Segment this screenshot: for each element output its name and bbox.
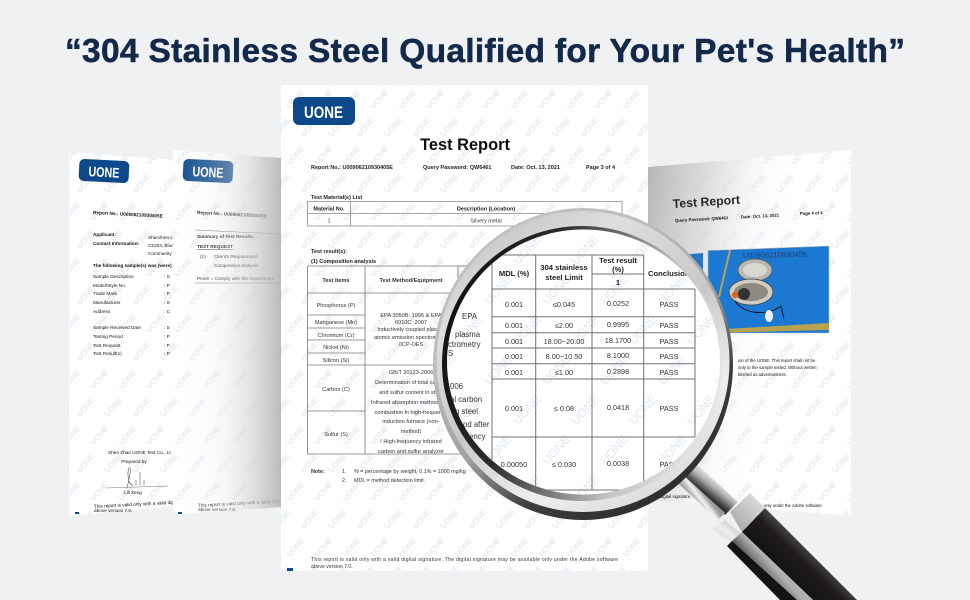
table values: ≤1.00: [555, 368, 573, 377]
title: “304 Stainless Steel Qualified for Your Pet's Health”: [65, 33, 905, 70]
logo: UONE page 2: [182, 159, 234, 183]
table values: ≤0.045: [553, 300, 575, 309]
table header: MDL (%): [499, 269, 530, 278]
table: composition analysis: combustion in high-frequency: [374, 410, 448, 416]
table: composition analysis: atomic emission spectrometry: [374, 335, 448, 341]
table values: 0.001: [505, 404, 523, 413]
text block: applicant details: Prepared by: [121, 459, 147, 464]
table: composition analysis: / High-frequency infrared: [380, 439, 442, 445]
text block: applicant details: Manufacturer: [93, 300, 121, 305]
text block: applicant details: Community: [148, 251, 172, 256]
text block: summary of results: above version 7.0.: [198, 507, 236, 512]
text block: applicant details: : P: [164, 343, 170, 348]
table header: [499, 258, 686, 285]
text block: applicant details: Shen Zhan UONE Test Co., Lt: [108, 450, 171, 455]
text block: summary of results: Client's Requirement: [214, 254, 258, 259]
text block: applicant details: Model/Style No.: [93, 283, 126, 288]
table values: 0.001: [505, 352, 523, 361]
text block: summary of results: PASS = Comply with the requirement: [197, 276, 275, 281]
photo: tested sample: U00906210930405: [743, 250, 807, 260]
table values: [501, 299, 679, 469]
table values: 0.9995: [607, 320, 629, 329]
text block: applicant details: Testing Period: [93, 334, 123, 339]
text block: applicant details: : P: [164, 351, 170, 356]
table: test materials: Description (Location): [457, 206, 515, 212]
text block: applicant details: The following sample(s) was (were): [93, 263, 172, 268]
logo: UONE page 2: UONE: [192, 163, 224, 181]
table: test materials: [308, 202, 622, 226]
text block: applicant details: : P: [164, 283, 170, 288]
logo: UONE page 1: UONE: [88, 163, 120, 181]
heading: test report page 4: Test Report: [672, 193, 740, 211]
table header: steel Limit: [545, 273, 583, 282]
table: composition analysis: EPA 3050B: 1996 & EPA: [380, 313, 442, 319]
magnified method text: od after: [463, 420, 490, 429]
table: composition analysis: method): [401, 429, 421, 435]
text block: applicant details: : S: [164, 325, 170, 330]
text block: notes: % = percentage by weight, 0.1% = 1000 mg/kg: [354, 469, 466, 475]
text block: report meta: Query Password: QW6461: [423, 165, 491, 171]
table values: 0.001: [505, 368, 523, 377]
text block: applicant details: above version 7.0.: [94, 508, 132, 513]
heading: test report: Test Report: [420, 136, 510, 154]
text block: page 4 notes: ion of the UONE. This report shall not be: [738, 358, 816, 363]
text block: report meta: Page 3 of 4: [586, 165, 616, 171]
text block: summary of results: This report is valid only with a valid digit: [198, 499, 281, 508]
table values: 18.1700: [605, 336, 631, 345]
magnified method text: [448, 312, 490, 441]
table header: 304 stainless: [540, 263, 588, 272]
table values: PASS: [660, 404, 679, 413]
text block: applicant details: : S: [164, 300, 170, 305]
text block: applicant details: Sample Received Date: [93, 325, 141, 330]
text block: applicant details: Sample Description: [93, 274, 134, 279]
table: composition analysis: Infrared absorption method after: [371, 400, 451, 406]
table: composition analysis: Test Method/Equipment: [380, 278, 443, 284]
panel: main test report page: [281, 85, 648, 571]
table: composition analysis: Phosphorus (P): [317, 303, 356, 309]
magnified method text: EPA: [462, 312, 478, 321]
panel: magnified lens table: [445, 228, 722, 496]
text block: applicant details: Test Result(s): [93, 351, 122, 356]
table: composition analysis: Determination of total carbon: [375, 380, 447, 386]
text block: summary of results: TEST REQUEST: [197, 244, 233, 249]
table: composition analysis: Sulfur (S): [324, 432, 348, 438]
table values: ≤2.00: [555, 321, 573, 330]
table: test materials: 1: [327, 218, 331, 224]
table: test materials: Material No.: [313, 206, 345, 212]
logo: UONE page 1: [78, 159, 130, 183]
text block: material heading: Test Material(s) List: [311, 195, 362, 201]
text block: report line: [675, 210, 823, 223]
table values: 0.2898: [607, 367, 629, 376]
table: composition analysis: and sulfur content in steel: [379, 390, 443, 396]
text block: footer: [311, 557, 618, 570]
text block: summary of results: (1): [200, 254, 206, 259]
text block: report line: Date: Oct. 13, 2021: [741, 212, 780, 219]
text block: notes: Note:: [311, 469, 325, 475]
text block: report line: Page 4 of 4: [800, 210, 823, 216]
table values: 0.001: [505, 300, 523, 309]
text block: applicant details: [93, 210, 177, 513]
text block: applicant details: Contact Information:: [93, 241, 140, 246]
table values: 0.0038: [607, 459, 629, 468]
panel: right report page: [640, 150, 851, 516]
table values: 8.1000: [607, 351, 629, 360]
text block: page 4 notes: only to the sample tested. Without written: [738, 365, 817, 370]
text block: applicant details: : P: [164, 291, 170, 296]
table values: ≤ 0.030: [552, 460, 576, 469]
text block: page 4 notes: digital signature.: [660, 494, 691, 499]
magnified method text: ency: [469, 432, 486, 441]
text block: applicant details: : C: [164, 309, 171, 314]
text block: report meta: [311, 165, 616, 171]
table: composition analysis: [308, 266, 500, 455]
table: composition analysis: /ICP-OES: [399, 342, 424, 348]
logo: UONE main: UONE: [304, 103, 343, 122]
table values: 0.001: [505, 337, 523, 346]
text block: applicant details: Applicant:: [93, 232, 116, 237]
table values: PASS: [660, 352, 679, 361]
table values: 0.001: [505, 321, 523, 330]
text block: applicant details: : P: [164, 334, 170, 339]
table values: PASS: [660, 321, 679, 330]
table header: Test result: [599, 256, 637, 265]
text block: notes: 1.: [342, 469, 346, 475]
text block: applicant details: This report is valid only with a valid digit: [94, 500, 177, 509]
page shadow: [173, 150, 281, 515]
table: composition analysis: Test Items: [322, 278, 350, 284]
table: composition analysis: Inductively coupled plasma: [377, 327, 445, 333]
table: composition analysis: Carbon (C): [322, 387, 350, 393]
text block: page 4 notes: blished as advertisement.: [738, 372, 787, 377]
text block: footer: above version 7.0.: [311, 564, 353, 570]
table: composition analysis: induction furnace (non-: [382, 419, 440, 425]
magnified method text: plasma: [455, 330, 481, 339]
text block: report line: Query Password: QW6461: [675, 215, 729, 223]
panel: left report page 2: [173, 150, 281, 515]
panel: left report page 1: [69, 152, 177, 516]
table values: PASS: [660, 460, 679, 469]
table header: (%): [612, 265, 624, 274]
table values: 8.00~10.50: [546, 352, 582, 361]
text block: notes: MDL = method detection limit.: [354, 478, 425, 484]
table values: PASS: [660, 337, 679, 346]
text block: footer: This report is valid only with a valid digital signature. The digital signature may be available only under the Adobe software: [311, 557, 618, 563]
text block: applicant details: Shenzhen L: [148, 235, 173, 240]
text block: applicant details: : S: [164, 274, 170, 279]
table: composition analysis: Chromium (Cr): [318, 333, 355, 339]
table: composition analysis: GB/T 20123-2006: [389, 370, 433, 376]
icon: signature: [127, 468, 144, 488]
magnified method text: 006: [450, 382, 463, 391]
magnified method text: al carbon: [450, 395, 482, 404]
icon: magnifier ring: [433, 208, 733, 520]
table header: Conclusion: [648, 269, 690, 278]
text block: summary of results: Report No.: U00906210930405E: [197, 210, 267, 219]
table values: 0.0252: [607, 299, 629, 308]
text block: results heading: Test result(s):: [311, 249, 347, 255]
table: composition analysis: Nickel (Ni): [323, 345, 349, 351]
table: composition analysis: carbon and sulfur analyzer: [378, 449, 444, 455]
text block: summary of results: Composition analysis: [214, 263, 259, 268]
text block: applicant details: Report No.: U00906210930405E: [93, 210, 163, 219]
magnified method text: g steel: [455, 407, 478, 416]
table: composition analysis: 6010C: 2007: [395, 320, 427, 326]
table: composition analysis: Silicon (Si): [323, 358, 350, 364]
logo: UONE main: [293, 97, 355, 125]
text block: page 4 notes: [660, 358, 822, 508]
text block: page 4 notes: file only under the Adobe software: [757, 503, 822, 508]
text block: applicant details: C2203, Bloc: [148, 243, 174, 248]
table values: PASS: [660, 300, 679, 309]
table values: 0.00050: [501, 460, 527, 469]
table values: 18.00~20.00: [544, 337, 584, 346]
text block: applicant details: Trade Mark: [93, 291, 117, 296]
table header: 1: [616, 278, 621, 287]
text block: applicant details: Address: [93, 309, 111, 314]
table: test materials: Silvery metal: [470, 218, 502, 224]
magnified method text: S: [448, 349, 453, 358]
text block: results heading: (1) Composition analysis: [311, 259, 376, 265]
text block: report meta: Date: Oct. 13, 2021: [511, 165, 560, 171]
text block: report meta: Report No.: U00906210930405E: [311, 165, 393, 171]
text block: notes: 2.: [342, 478, 346, 484]
text block: notes: [311, 469, 466, 484]
table: magnified results: [448, 255, 695, 490]
text block: summary of results: Summary of Test Results:: [197, 234, 255, 239]
text block: applicant details: Lili Zeng: [124, 490, 142, 495]
text block: results heading: [311, 249, 376, 265]
text block: summary of results: [197, 210, 281, 512]
table: composition analysis: Manganese (Mn): [315, 320, 357, 326]
magnified method text: ctrometry: [448, 340, 481, 349]
text block: applicant details: Test Request: [93, 343, 121, 348]
table values: PASS: [660, 368, 679, 377]
icon: magnifier handle: [672, 460, 857, 600]
photo: tested sample: [640, 246, 829, 335]
table values: ≤ 0.08: [554, 404, 574, 413]
table values: 0.0418: [607, 403, 629, 412]
